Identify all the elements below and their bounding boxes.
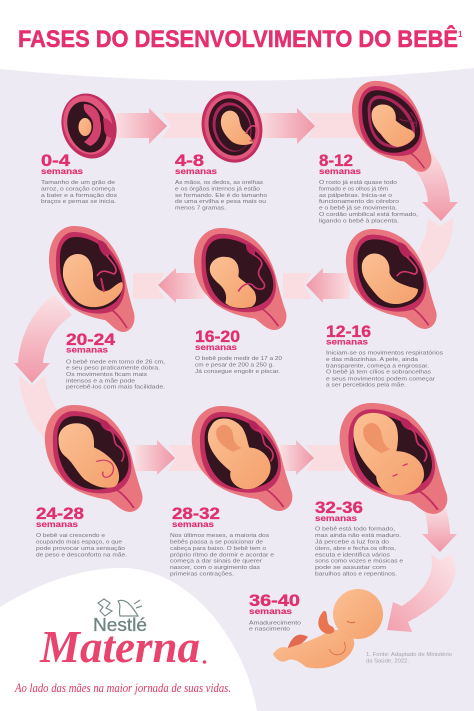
text block: Amadurecimento — [249, 620, 301, 626]
text block: as pálpebras. Inicia-se o — [319, 193, 392, 199]
text block: próprio ritmo de dormir e acordar e — [170, 552, 274, 558]
text block: e os órgãos internos já estão — [175, 186, 260, 192]
text block: mas ainda não está maduro. — [315, 533, 402, 539]
text block — [41, 180, 117, 205]
logo: Nestlé Materna — [39, 599, 206, 672]
text block: Tamanho de um grão de — [41, 180, 115, 186]
text block: nascer, com o surgimento das — [170, 565, 260, 571]
illustration: fetus 28-32 — [192, 406, 292, 511]
text block: pode se assustar com — [315, 565, 386, 571]
heading: 36-40: 36-40 — [249, 591, 300, 610]
text block: O bebê pode medir de 17 a 20 — [195, 356, 282, 362]
text block: transparente, começa a engrossar. — [326, 363, 430, 369]
illustration: fetus 24-28 — [45, 405, 142, 512]
arrows: row two — [133, 268, 350, 303]
stage: 16-20 weeks — [194, 228, 286, 375]
illustration: fetus 32-36 — [340, 403, 447, 514]
text block: útero, abre e fecha os olhos, — [315, 546, 397, 552]
text block: barulhos altos e repentinos. — [315, 571, 398, 577]
illustration: embryo 0-4 — [53, 86, 125, 166]
wordmark: Nestlé: Nestlé — [93, 615, 147, 635]
heading: 32-36: 32-36 — [315, 498, 363, 517]
text block: cm e pesar de 200 a 250 g. — [195, 362, 275, 368]
text block: de uma ervilha e pesa mais ou — [175, 199, 266, 205]
stage: 12-16 weeks — [326, 229, 443, 389]
subheading: semanas — [36, 519, 78, 529]
title: 1 — [458, 30, 463, 39]
text block: começa a dar sinais de querer — [170, 559, 262, 565]
subheading: semanas — [41, 166, 83, 176]
subheading: semanas — [326, 336, 368, 346]
text block: pode provocar uma sensação — [36, 546, 125, 552]
stage: 32-36 weeks — [315, 403, 447, 577]
arrow: row one to row two — [415, 148, 458, 275]
text block: Iniciam-se os movimentos respiratórios — [326, 351, 443, 357]
text block: O bebê mede em torno de 26 cm, — [66, 359, 166, 365]
text block: bebês passa a se posicionar de — [170, 539, 263, 545]
text block: Já consegue engolir e piscar. — [195, 369, 281, 375]
icon: Nestlé nest — [98, 599, 142, 616]
text block — [315, 527, 403, 577]
text block: formado e os olhos já têm — [319, 186, 388, 192]
text block — [175, 180, 267, 212]
text block — [195, 356, 282, 375]
text block: Já percebe a luz fora do — [315, 539, 389, 545]
text block: e das mãozinhas. A pele, ainda — [326, 357, 419, 363]
text block: e o bebê já se movimenta. — [319, 206, 398, 212]
illustration: fetus 20-24 — [49, 226, 135, 332]
subheading: semanas — [315, 513, 357, 523]
arrow: row three to final — [387, 505, 457, 632]
text block: O bebê já tem cílios e sobrancelhas — [326, 370, 431, 376]
stage: 8-12 weeks — [319, 81, 431, 224]
stage: 28-32 weeks — [170, 406, 292, 577]
text block: Os movimentos ficam mais — [66, 372, 147, 378]
text block: O bebê está todo formado, — [315, 527, 396, 533]
heading: 4-8: 4-8 — [175, 151, 204, 170]
text block — [170, 533, 274, 577]
text block: sons como vozes e músicas e — [315, 559, 403, 565]
subheading: semanas — [195, 342, 237, 352]
text block: a bater e a formação dos — [41, 193, 117, 199]
text block: As mãos, os dedos, as orelhas — [175, 180, 263, 186]
illustration: fetus 12-16 — [346, 229, 437, 329]
text block: a ser percebidos pela mãe. — [326, 383, 407, 389]
text block — [249, 620, 301, 633]
heading: 20-24: 20-24 — [66, 330, 116, 349]
text block: O bebê vai crescendo e — [36, 533, 105, 539]
text block: se formando. Ele é do tamanho — [175, 193, 267, 199]
text block: intensos e a mãe pode — [66, 378, 135, 384]
arrow: row two to row three — [14, 294, 72, 440]
heading: 12-16: 12-16 — [326, 322, 371, 341]
illustration: embryo 4-8 — [194, 84, 270, 170]
stage: 4-8 weeks — [175, 84, 270, 212]
text block: percebê-los com mais facilidade. — [66, 385, 166, 391]
text block — [66, 359, 166, 391]
stage: 36-40 weeks — [249, 589, 383, 668]
source note: da Saúde, 2022. — [366, 658, 409, 664]
arrows: row one — [116, 108, 358, 144]
text block: ocupando mais espaço, o que — [36, 540, 122, 546]
source note: 1. Fonte: Adaptado de Ministério — [366, 652, 452, 658]
text block: O cordão umbilical está formado, — [319, 212, 419, 218]
subheading: semanas — [249, 606, 292, 616]
source note — [366, 652, 452, 664]
subheading: semanas — [172, 519, 214, 529]
heading: 8-12: 8-12 — [319, 151, 353, 170]
text block: ligando o bebê à placenta. — [319, 218, 400, 224]
subheading: semanas — [319, 166, 361, 176]
illustration: fetus 16-20 — [194, 228, 286, 330]
heading: 28-32: 28-32 — [172, 504, 220, 523]
registered dot — [203, 660, 206, 664]
text block: escuta e identifica vários — [315, 552, 390, 558]
text block — [319, 180, 419, 224]
tagline: Ao lado das mães na maior jornada de suas vidas. — [14, 681, 231, 695]
text block: Nos últimos meses, a maioria dos — [170, 533, 269, 539]
text block: e nascimento — [249, 627, 290, 633]
white logo area — [0, 568, 257, 711]
heading: 0-4: 0-4 — [41, 151, 71, 170]
stage: 24-28 weeks — [36, 405, 142, 558]
heading: 24-28: 24-28 — [36, 504, 84, 523]
text block: O rosto já está quase todo — [319, 180, 397, 186]
text block — [326, 351, 443, 389]
text block: de peso e desconforto na mãe. — [36, 552, 128, 558]
stage: 20-24 weeks — [49, 226, 166, 391]
text block: e seu peso praticamente dobra. — [66, 366, 161, 372]
text block: cabeça para baixo. O bebê tem o — [170, 546, 266, 552]
text block: e seus movimentos podem começar — [326, 376, 435, 382]
illustration: newborn — [273, 589, 383, 668]
arrows: row three — [135, 440, 345, 475]
text block: menos 7 gramas. — [175, 206, 227, 212]
text block: braços e pernas se inicia. — [41, 199, 117, 205]
stage: 0-4 weeks — [41, 86, 125, 205]
text block — [36, 533, 128, 558]
heading: 16-20: 16-20 — [195, 327, 240, 346]
text block: funcionamento do cérebro — [319, 199, 399, 205]
wordmark: Materna: Materna — [39, 621, 200, 672]
text block: arroz, o coração começa — [41, 186, 116, 192]
subheading: semanas — [66, 345, 108, 355]
subheading: semanas — [175, 166, 217, 176]
illustration: fetus 8-12 — [352, 81, 431, 172]
text block: primeiras contrações. — [170, 571, 235, 577]
